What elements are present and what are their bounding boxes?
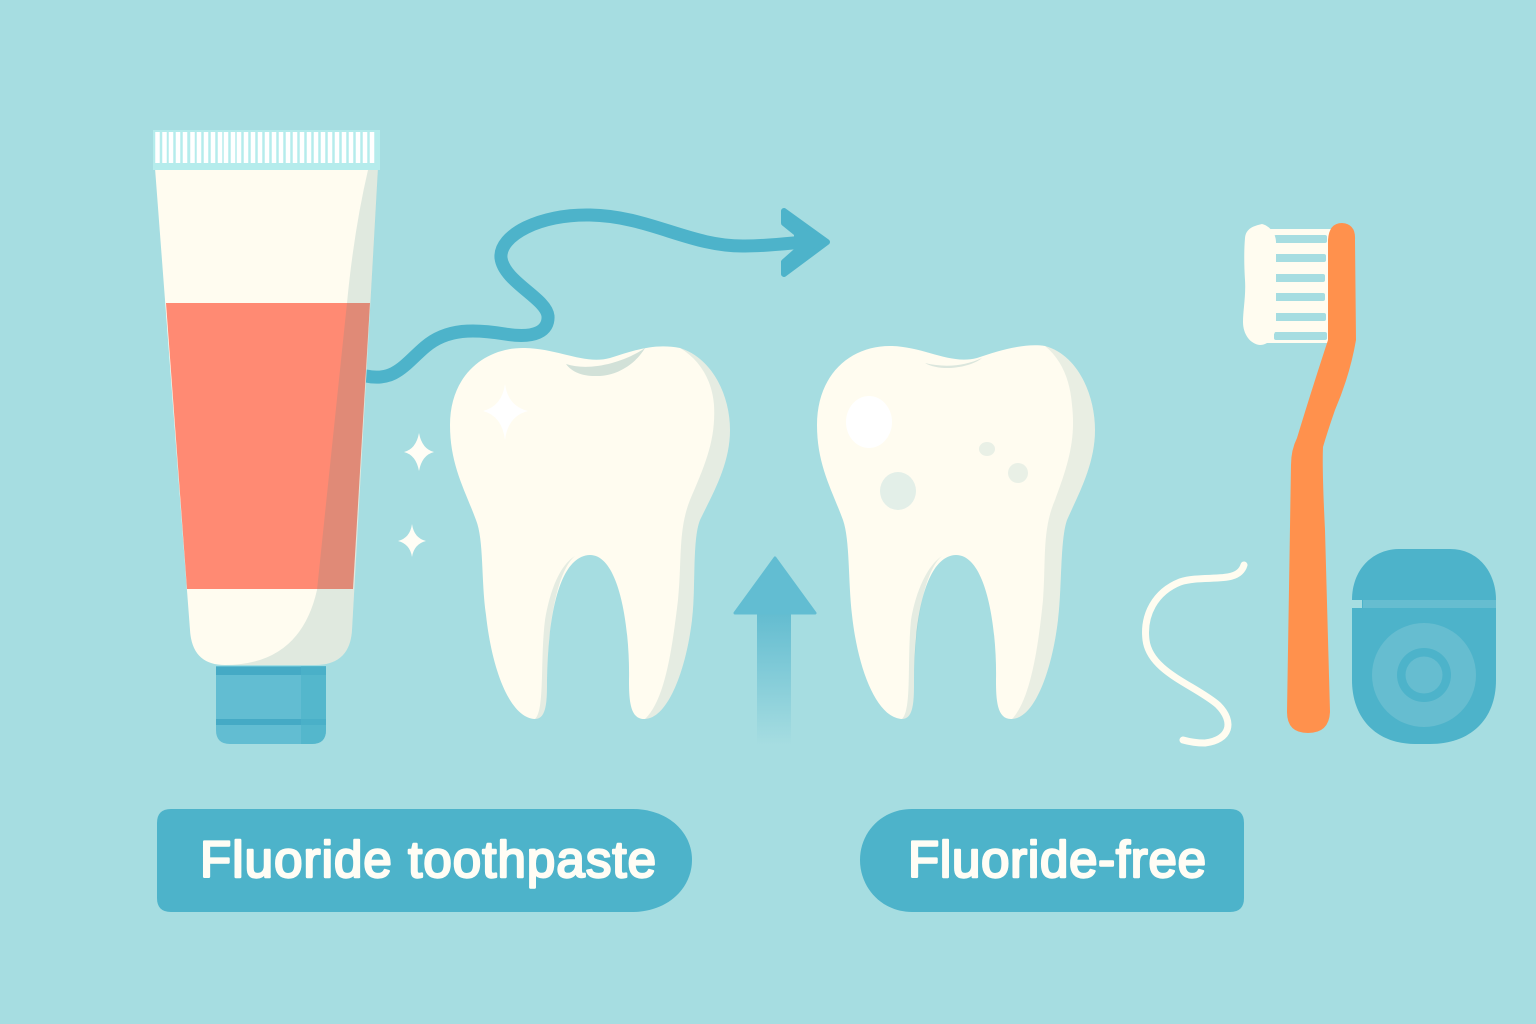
handle	[1287, 223, 1356, 733]
sparkles	[398, 433, 434, 557]
tube shading	[225, 170, 378, 665]
toothbrush	[1243, 223, 1356, 733]
bristles	[1243, 224, 1332, 345]
sparkle on tooth	[483, 384, 528, 440]
tube body	[155, 168, 378, 665]
crimped end	[153, 130, 380, 170]
label: fluoride-free	[860, 809, 1244, 912]
toothpaste tube	[153, 130, 380, 744]
curved arrow	[366, 211, 827, 377]
label: fluoride-free: Fluoride-free	[908, 831, 1206, 888]
up arrow	[735, 558, 815, 745]
label: fluoride toothpaste: Fluoride toothpaste	[200, 831, 656, 888]
tooth spots	[846, 396, 1028, 510]
label: fluoride toothpaste	[157, 809, 692, 912]
red band	[166, 303, 370, 589]
tube cap	[216, 666, 326, 744]
floss strand	[1146, 565, 1244, 743]
right tooth	[817, 345, 1095, 719]
floss container	[1352, 549, 1496, 744]
left tooth	[450, 346, 730, 719]
